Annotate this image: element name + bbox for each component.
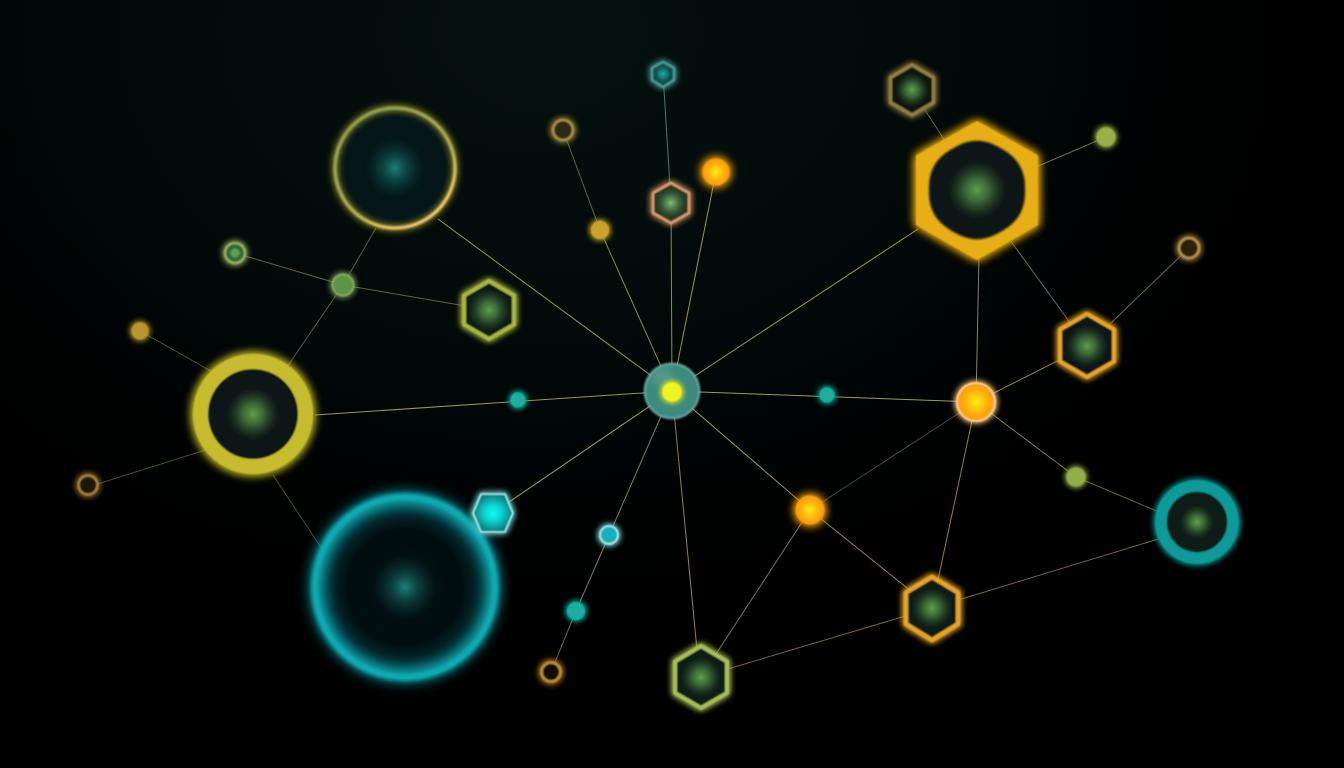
hexagon: small olive-gold <box>890 65 934 115</box>
dot: gold top centre <box>591 221 609 239</box>
hexagon: peach <box>653 183 689 223</box>
small ring: top centre <box>553 120 573 140</box>
thick ring: yellow <box>200 362 306 466</box>
dot: cyan with pale outline <box>600 526 618 544</box>
dot: teal lower <box>567 602 585 620</box>
small ring: bottom <box>542 662 560 682</box>
hexagon: lime bottom <box>675 646 727 708</box>
glowing node: orange with pale outline <box>957 383 995 421</box>
small ring: left <box>78 476 98 494</box>
hexagon: gold right <box>1060 314 1114 377</box>
hexagon: bright cyan <box>473 494 513 532</box>
central hub <box>644 364 700 418</box>
glowing dot: orange top <box>702 158 730 186</box>
large ring: olive and gold <box>335 108 455 228</box>
junction dot: green <box>332 274 354 296</box>
dot: amber left <box>132 322 148 340</box>
thick ring: teal <box>1161 486 1233 558</box>
dot: lime lower right <box>1066 468 1086 486</box>
connecting lines <box>88 74 1197 677</box>
hexagon: teal top <box>652 62 674 87</box>
large ring: cyan <box>313 495 497 679</box>
dot: teal right of centre <box>820 388 834 402</box>
small ring: green <box>225 243 245 263</box>
glowing dot: orange lower <box>796 496 824 524</box>
small ring: right <box>1179 238 1199 258</box>
dot: teal left of centre <box>510 392 526 408</box>
dot: lime top right <box>1096 128 1116 146</box>
hexagon: lime <box>464 281 514 339</box>
hexagon: gold lower <box>906 577 958 640</box>
hexagon: large gold <box>916 121 1038 260</box>
